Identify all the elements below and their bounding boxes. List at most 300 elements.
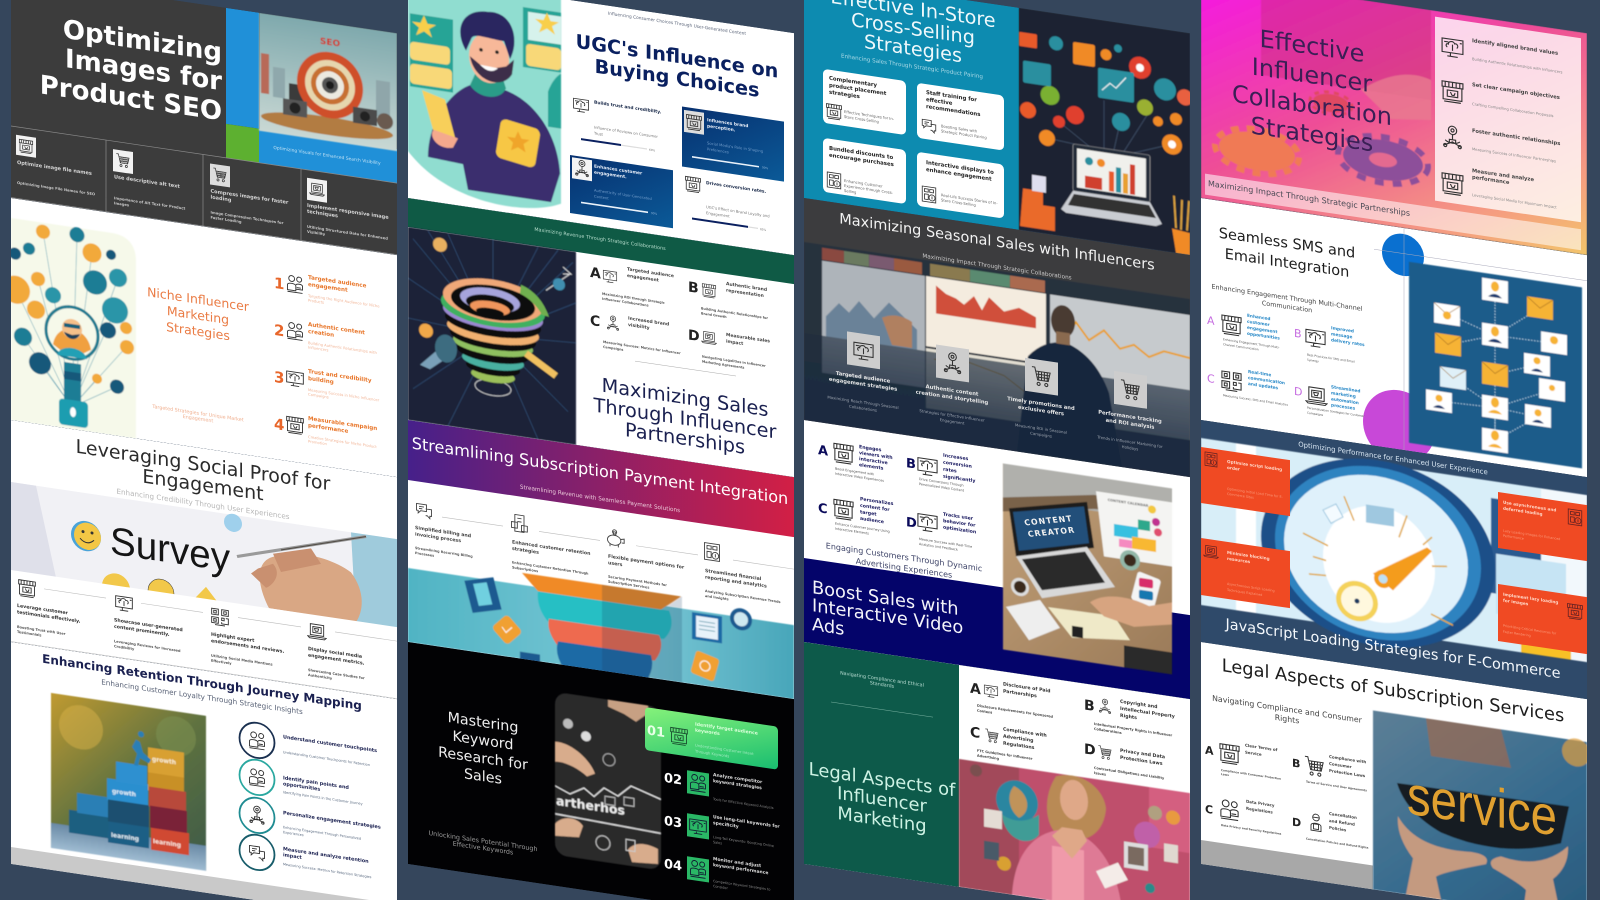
photo: survey: Survey <box>110 520 230 580</box>
item: relationships <box>1444 124 1560 164</box>
grid item B <box>688 275 768 325</box>
subtitle: Unlocking Sales Potential Through <box>428 829 538 853</box>
subtitle: Enhancing Credibility Through User Experiences <box>116 487 290 521</box>
illustration: influencer network <box>2 216 136 438</box>
item: payment options: Flexible payment options for <box>608 554 685 571</box>
card: blocking resources: resources <box>1227 556 1251 564</box>
grid B: Intellectual Property Rights in Influencer <box>1094 722 1173 738</box>
feature: responsive: techniques <box>307 209 338 219</box>
card: placement <box>823 69 906 135</box>
header band <box>408 198 794 284</box>
caption: Optimizing Visuals for Enhanced Search Visibility <box>273 145 381 167</box>
grid B: Synergy <box>1307 358 1319 363</box>
grid D: Analytics and Feedback <box>919 542 958 552</box>
item: financial reporting: Analyzing Subscription Revenue Trends <box>705 589 781 604</box>
grid D: Tracks user <box>943 512 974 522</box>
step 03: Sales <box>713 840 722 846</box>
grid C: and updates <box>1248 381 1279 391</box>
strategy: tracking: Holidays <box>1122 444 1138 451</box>
grid A: elements <box>859 462 884 472</box>
grid C: Enhance Customer Journey Using <box>835 522 890 534</box>
item 4: Authenticity <box>308 673 333 681</box>
strategy: tracking <box>1096 368 1163 455</box>
card: script order: order <box>1227 465 1241 472</box>
grid item D: impact <box>726 339 744 347</box>
feature row <box>11 126 397 255</box>
step: pain points: Identifying Pain Points in the Customer Journey <box>283 790 363 806</box>
photo: blocks: learning <box>153 838 181 849</box>
card: conversion: Engagement <box>706 211 730 219</box>
subtitle: Enhancing Customer Loyalty Through Strategic Insights <box>101 677 303 716</box>
card: brand perception <box>682 107 784 182</box>
grid A: Disclosure of Paid <box>1003 681 1051 694</box>
grid C: Advertising <box>977 754 1000 761</box>
feature: responsive: Utilizing Structured Data for Enhanced <box>307 225 388 241</box>
slide: Optimizing Images for Product SEO <box>11 0 397 255</box>
grid D: behavior for <box>943 518 976 529</box>
step 1: Products <box>308 298 324 305</box>
grid A: Disclosure Requirements for Sponsored <box>977 704 1054 719</box>
card: placement: Effective Techniques for In- <box>844 110 895 121</box>
strategy: tracking: and ROI analysis <box>1106 418 1154 431</box>
grid item A: A <box>590 265 601 283</box>
card: blocking resources: Minimize blocking <box>1227 550 1270 561</box>
grid item B: Authentic brand <box>726 281 767 293</box>
step 03: specificity <box>713 820 739 830</box>
grid item A <box>590 261 674 311</box>
item 4: engagement metrics. <box>308 652 365 667</box>
grid C <box>1207 363 1288 407</box>
card: blocking resources: Techniques Explained <box>1226 588 1262 597</box>
grid item C: C <box>590 313 600 330</box>
title: Email Integration <box>1225 246 1349 281</box>
card: training: Boosting Sales with <box>941 124 978 134</box>
item: objectives <box>1442 78 1560 119</box>
grid item D: Measurable sales <box>726 332 770 345</box>
strategy: promotions: Campaigns <box>1030 430 1052 439</box>
grid D: Protection Laws <box>1120 755 1163 767</box>
slide: Boost Sales with Interactive Video Ads <box>804 420 1190 699</box>
grid C: Personalizes <box>860 496 894 507</box>
step 4: Promotion <box>308 439 327 446</box>
item: financial reporting: Streamlined financial <box>705 568 762 582</box>
photo: SEO camera lens <box>259 13 397 151</box>
slide: Effective In-Store Cross-Selling Strategies <box>804 0 1193 256</box>
title: Buying Choices <box>595 55 759 102</box>
item 2: content prominently. <box>114 624 170 638</box>
title: Ads <box>812 614 844 640</box>
title: Legal Aspects of Subscription Services <box>1222 655 1564 727</box>
card: conversion <box>686 176 770 233</box>
card: brand perception: 90% <box>762 165 769 170</box>
feature: compress: loading <box>211 195 232 204</box>
card: trust <box>574 97 662 154</box>
step 1: engagement <box>308 282 348 294</box>
grid D <box>1084 742 1165 785</box>
grid C <box>970 722 1047 768</box>
bottom band <box>11 847 397 900</box>
grid D: marketing <box>1331 390 1356 400</box>
slide: Streamlining Subscription Payment Integration <box>408 420 794 705</box>
step 04 <box>664 849 770 897</box>
item 2: Credibility <box>114 644 135 651</box>
header caption: Optimizing Performance for Enhanced User Experience <box>1298 440 1488 476</box>
grid B: B <box>1294 327 1302 341</box>
step 02: 02 <box>664 771 682 789</box>
item row <box>415 500 794 611</box>
title: Streamlining Subscription Payment Integration <box>412 434 788 508</box>
feature: alt text: Importance of Alt Text for Product <box>114 196 186 211</box>
subtitle: Engagement <box>183 414 213 424</box>
grid B <box>1294 320 1365 370</box>
step 04: keyword performance <box>713 862 768 876</box>
step 3: Campaigns <box>308 392 329 400</box>
grid B: Copyright and <box>1120 699 1157 710</box>
strategy: promotions <box>1007 355 1075 442</box>
feature: compress <box>210 164 288 224</box>
step 2: Building Authentic Relationships with <box>308 341 377 355</box>
title: Influencer <box>837 783 927 817</box>
grid A: interactive <box>859 456 888 466</box>
grid B: Increases <box>943 453 968 462</box>
grid B: significantly <box>943 474 975 484</box>
card: async loading: Use asynchronous and <box>1503 500 1556 513</box>
column 4 slides <box>1201 0 1590 900</box>
journey steps <box>240 720 381 888</box>
strategy: targeted: Collaborations <box>849 404 877 413</box>
title: Legal Aspects of <box>809 759 956 801</box>
item: retention: Subscriptions <box>512 565 538 573</box>
item: billing: Simplified billing and <box>415 525 471 539</box>
item: brand values: Identify aligned brand values <box>1472 38 1558 57</box>
card: engagement: Authenticity of User-Generated <box>594 189 652 201</box>
title: Partnerships <box>625 418 745 459</box>
column 2 slides <box>408 0 794 900</box>
card: engagement <box>570 155 673 228</box>
photo: SEO camera lens: SEO <box>320 37 340 50</box>
card: discounts: Enhancing Customer <box>844 179 883 189</box>
card: async loading: Lazy Loading Images for Enhanced <box>1503 529 1560 541</box>
card: trust: Influence of Reviews on Consumer <box>594 126 658 139</box>
item 2 <box>114 595 183 658</box>
step 04: Competitor Keyword Strategies to <box>713 879 770 892</box>
card: discounts <box>823 138 906 204</box>
illustration: funnel <box>408 227 576 445</box>
strategy: targeted: Targeted audience <box>836 371 891 385</box>
card: blocking resources <box>1201 538 1290 608</box>
card: engagement: 90% <box>651 211 658 216</box>
grid B: Drive Conversions Through <box>919 477 964 488</box>
grid D: Issues <box>1094 771 1106 777</box>
card: async loading <box>1498 492 1587 561</box>
grid B: rates <box>943 467 957 475</box>
step 2: Influencers <box>308 345 329 352</box>
strategy: authentic: Authentic content <box>926 384 979 398</box>
grid A: Enhancing Engagement Through Multi- <box>1223 337 1279 350</box>
card: placement: strategies <box>829 90 860 100</box>
item: payment options: Subscription Services <box>608 580 649 590</box>
title: Cross-Selling <box>851 8 975 49</box>
grid item C: Increased brand <box>628 316 669 328</box>
grid A: viewers with <box>859 450 893 461</box>
grid B: Compliance with <box>1329 754 1366 764</box>
step 4: Creative Strategies for Niche Product <box>308 435 377 449</box>
item: brand values: Building Authentic Relationships with Influencers <box>1472 57 1563 75</box>
grid A: Content <box>977 709 993 715</box>
grid A: Engages <box>859 444 882 453</box>
title: UGC's Influence on <box>576 30 778 83</box>
grid C: Data Privacy <box>1246 799 1275 808</box>
slide: UGC's Influence on Buying Choices <box>408 0 794 255</box>
card: training: Strategic Product Pairing <box>941 129 987 140</box>
subtitle: Advertising Experiences <box>856 557 952 580</box>
slide: Legal Aspects of Influencer Marketing <box>804 642 1190 900</box>
photo: analytics wall and analyst <box>804 242 1190 477</box>
subtitle: Streamlining Revenue with Seamless Payment Solutions <box>520 485 680 514</box>
grid A <box>1207 307 1280 355</box>
grid item A: engagement <box>627 273 660 284</box>
step: pain points: Identify pain points and <box>283 775 349 791</box>
illustration: speed gauge <box>1201 434 1587 677</box>
grid B: message <box>1331 332 1352 340</box>
grid item D: Navigating Legalities in Influencer <box>702 355 766 368</box>
grid D <box>1294 379 1365 423</box>
grid D: Campaigns <box>1307 411 1324 417</box>
item: objectives: Set clear campaign objectives <box>1472 82 1560 101</box>
caption: Maximizing Impact Through Strategic Partnerships <box>1208 179 1410 218</box>
grid item B: B <box>688 280 699 297</box>
highlighted step 01: keywords <box>695 727 720 737</box>
grid item C <box>590 310 681 360</box>
step 02: Analyze competitor <box>713 772 763 786</box>
grid B: Best Practices for SMS and Email <box>1307 353 1355 364</box>
item 1: Leverage customer <box>17 603 69 617</box>
feature: responsive: Visibility <box>307 230 326 237</box>
grid A: opportunities <box>1247 331 1280 342</box>
grid C: Real-time <box>1248 369 1271 378</box>
grid C: audience <box>860 516 884 525</box>
grid D: optimization <box>943 525 976 535</box>
step 04: Consider <box>713 884 729 890</box>
step: touchpoints: Understanding Customer Touchpoints for Retention <box>283 750 370 767</box>
item: financial reporting: and Insights <box>705 594 729 601</box>
step 1: Targeted audience <box>308 275 367 290</box>
card: discounts: encourage purchases <box>829 153 894 168</box>
title: Maximizing Seasonal Sales with Influencers <box>839 210 1155 274</box>
grid item D: Marketing Agreements <box>702 360 744 370</box>
grid item B: Brand Growth <box>701 311 727 319</box>
card: trust: 60% <box>649 148 656 153</box>
card: placement: Store Cross-Selling <box>844 115 879 124</box>
blue and green accent blocks <box>226 8 397 183</box>
feature: compress: Compress images for faster <box>211 189 289 206</box>
item 3: endorsements and reviews. <box>211 638 284 655</box>
card: conversion: UGC's Effect on Brand Loyalty and <box>706 205 770 219</box>
step: measure: impact <box>283 852 302 861</box>
grid item C: Measuring Success: Metrics for Influencer <box>603 340 681 355</box>
grid B: conversion <box>943 460 972 470</box>
title: Mastering <box>448 710 518 736</box>
feature: compress: Faster Loading <box>211 216 242 224</box>
column 1 slides <box>2 0 397 900</box>
item 3: Effectively <box>211 659 232 666</box>
grid A: Laws <box>1221 772 1229 777</box>
step 4: performance <box>308 423 348 435</box>
title: Images for <box>65 44 222 97</box>
strategy: targeted <box>827 328 899 416</box>
feature: responsive: Implement responsive image <box>307 203 389 221</box>
item: payment options <box>608 529 685 595</box>
strategy: authentic: Strategies for Effective Influencer <box>919 408 985 423</box>
laptop screen lettering <box>1023 507 1076 546</box>
subtitle: Enhancing Sales Through Strategic Product Pairing <box>841 54 983 81</box>
strategy: promotions: Timely promotions and <box>1007 396 1075 412</box>
title: Influencer <box>1252 53 1372 98</box>
card: training <box>917 83 1004 151</box>
grid C: C <box>818 501 828 517</box>
card: brand perception: perception. <box>707 123 736 133</box>
step: personalize: Enhancing Engagement Through Personalized <box>283 825 361 841</box>
grid D: D <box>1294 385 1302 399</box>
title: Engagement <box>142 465 264 505</box>
slide: Niche Influencer Marketing Strategies <box>2 197 397 477</box>
item 1: Boosting Trust with User <box>17 625 66 636</box>
grid D: D <box>1292 816 1301 830</box>
item: performance: performance <box>1472 175 1510 186</box>
grid A: Enhanced <box>1247 313 1271 322</box>
step 4 <box>274 416 377 448</box>
photo: funnel on teal <box>408 556 794 705</box>
feature: responsive <box>307 178 389 246</box>
card: training: recommendations <box>926 104 980 118</box>
grid D: Privacy and Data <box>1120 748 1165 760</box>
title: Niche Influencer <box>147 284 250 314</box>
card: displays <box>917 152 1004 219</box>
caption: Standards <box>870 680 895 690</box>
decorative circles <box>1363 228 1435 468</box>
steps <box>274 270 380 454</box>
item: billing: invoicing process <box>415 532 461 544</box>
item 4 <box>308 623 365 685</box>
grid C: Advertising <box>1003 733 1034 744</box>
strategy: authentic: Engagement <box>940 417 965 426</box>
card: trust: Trust <box>593 131 603 137</box>
grid A: Channel Communication <box>1223 342 1259 352</box>
strategy: tracking: Trends in Influencer Marketing for <box>1096 434 1163 449</box>
slide: Maximizing Seasonal Sales with Influencers <box>804 198 1190 477</box>
grid D: Cancellation <box>1329 811 1357 820</box>
illustration: analytics laptop network <box>1019 8 1193 256</box>
highlighted step 01: Understanding Customer Intent <box>695 743 754 756</box>
item: relationships: Foster authentic relationships <box>1472 128 1560 147</box>
title: Research for <box>438 745 528 774</box>
step: measure: Measure and analyze retention <box>283 846 369 865</box>
card: displays: Store Cross-Selling <box>941 198 976 208</box>
step: personalize: Experiences <box>283 830 304 837</box>
grid C: FTC Guidelines for Influencer <box>977 749 1033 761</box>
step 1: 1 <box>274 274 284 293</box>
item 4: Display social media <box>308 646 362 660</box>
card: lazy loading: Prioritizing Critical Resources for <box>1503 624 1557 636</box>
grid A: Interactive Video Experiences <box>835 472 884 483</box>
slide: Enhancing Retention Through Journey Mapping <box>11 642 397 900</box>
grid B: B <box>1292 757 1300 771</box>
step 4: Measurable campaign <box>308 416 377 432</box>
subtitle: Maximizing Impact Through Strategic Collaborations <box>922 254 1072 282</box>
card: engagement: engagement. <box>594 170 627 180</box>
step: measure <box>240 832 372 887</box>
grid D <box>906 506 976 554</box>
grid D: and Refund <box>1329 818 1355 827</box>
grid C: target <box>860 509 877 518</box>
grid B: Personalized Video Content <box>919 482 965 493</box>
step 2: Authentic content <box>308 322 365 336</box>
item: relationships: Measuring Success of Influencer Partnerships <box>1472 147 1556 164</box>
highlighted step 01 <box>645 707 778 770</box>
photo: survey <box>11 482 397 628</box>
item: retention <box>512 514 590 581</box>
grid A: Clear Terms of <box>1245 743 1278 752</box>
title: Through Influencer <box>593 393 776 444</box>
card: discounts: Experience through Cross- <box>844 184 894 195</box>
strategy: promotions: exclusive offers <box>1018 405 1064 417</box>
item 2: Showcase user-generated <box>114 617 183 633</box>
navy block <box>804 558 1190 699</box>
grid C: Data Privacy and Security Regulations <box>1221 823 1282 836</box>
strategy: tracking: Performance tracking <box>1098 410 1162 425</box>
item: performance <box>1442 164 1557 210</box>
feature: compress: Image Compression Techniques for <box>211 211 284 225</box>
green panel <box>804 642 959 887</box>
card: lazy loading: Faster Rendering <box>1503 630 1531 638</box>
highlighted step 01: Identify target audience <box>695 721 758 737</box>
title: Marketing <box>837 803 927 837</box>
card: script order: Optimize script loading <box>1227 459 1282 472</box>
step 2 <box>275 322 376 354</box>
grid D: processes <box>1331 402 1356 412</box>
subtitle: Navigating Compliance and Consumer <box>1212 694 1363 725</box>
photo: influencer in pink <box>959 759 1190 900</box>
step 3: Measuring Success in Niche Influencer <box>308 388 380 403</box>
card: training: effective <box>926 97 953 107</box>
grid A: A <box>1205 744 1214 758</box>
grid item C: visibility <box>628 322 650 331</box>
grid B: Collaborations <box>1094 727 1122 735</box>
grid B: Terms of Service and User Agreements <box>1306 780 1367 793</box>
item: performance: Measure and analyze <box>1472 168 1534 183</box>
item: retention: Enhanced customer retention <box>512 539 590 557</box>
grid A <box>970 677 1054 724</box>
item 3 <box>211 608 284 673</box>
grid A <box>818 438 893 484</box>
card: trust: Builds trust and credibility. <box>594 100 662 116</box>
step 2: 2 <box>274 321 284 340</box>
step 03: Use long-tail keywords for <box>713 814 780 830</box>
panel: action list <box>1435 17 1581 222</box>
title: Leveraging Social Proof for <box>76 435 330 495</box>
slide: Legal Aspects of Subscription Services <box>1201 642 1590 900</box>
slide: Leveraging Social Proof for Engagement <box>11 420 397 699</box>
column 3 slides <box>804 0 1193 900</box>
grid C: Regulations <box>1003 740 1035 751</box>
step 02: keyword strategies <box>713 778 762 791</box>
grid item B: Building Authentic Relationships for <box>701 306 768 320</box>
card: placement: Complementary <box>829 76 877 89</box>
source line: Influencing Consumer Choices Through User-Generated Content <box>608 11 746 37</box>
highlighted step 01: 01 <box>647 723 665 741</box>
feature: file names: Optimizing Image File Names for SEO <box>17 181 95 196</box>
feature: file names: Optimize image file names <box>17 160 92 177</box>
